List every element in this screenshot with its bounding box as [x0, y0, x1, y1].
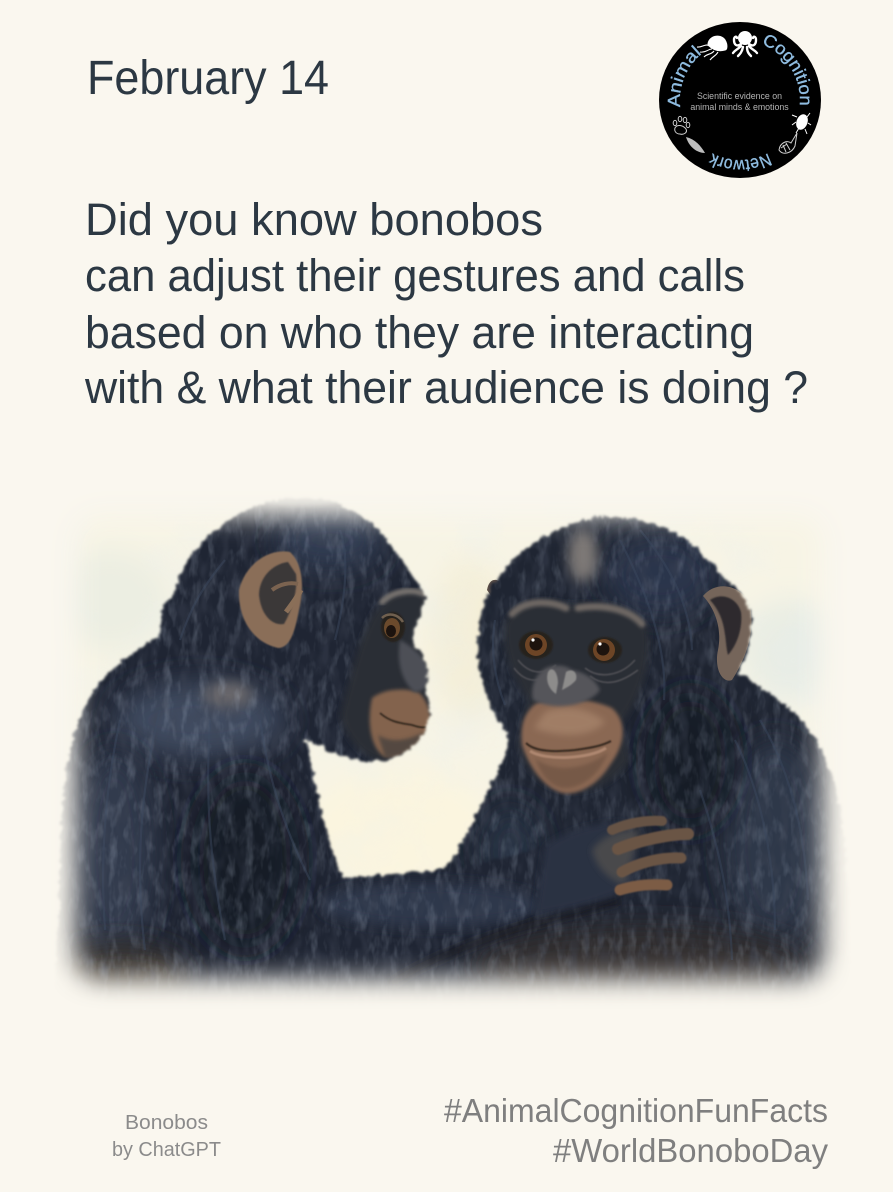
- hair strands: [493, 530, 808, 960]
- illustration: two bonobos: [56, 498, 844, 1000]
- hand: [535, 821, 688, 915]
- logo ring text: Network: [708, 153, 772, 172]
- image caption: [112, 1112, 221, 1161]
- icon: paw: [673, 116, 690, 134]
- left bonobo face: [340, 590, 434, 762]
- eye: [381, 612, 405, 642]
- muzzle: [370, 690, 430, 757]
- nose: [399, 640, 430, 692]
- lower lip and chin: [536, 755, 606, 788]
- left bonobo fur: [56, 498, 537, 1000]
- icon: fish: [779, 133, 797, 153]
- under-eye wrinkles: [514, 660, 638, 683]
- icon: beetle: [792, 113, 811, 134]
- image caption: Bonobos: [125, 1112, 208, 1134]
- arm shadow on chest: [390, 900, 620, 985]
- hashtags: #AnimalCognitionFunFacts: [444, 1092, 828, 1129]
- logo disc: [659, 22, 821, 178]
- left eye: [519, 631, 553, 659]
- muzzle: [522, 698, 623, 793]
- nose: [532, 666, 600, 706]
- brow: [382, 591, 424, 602]
- hair strands: [103, 530, 345, 950]
- mouth: [526, 741, 611, 751]
- logo tagline: Scientific evidence on: [697, 91, 782, 101]
- left bonobo ear: [239, 551, 302, 648]
- headline: with & what their audience is doing ?: [84, 362, 808, 413]
- icon: octopus: [733, 31, 757, 56]
- right bonobo face: [504, 601, 649, 793]
- right bonobo ear: [703, 586, 752, 681]
- right bonobo: [394, 514, 844, 1000]
- brow ridges: [512, 603, 642, 624]
- hashtags: [444, 1092, 828, 1169]
- fingers: [612, 821, 688, 890]
- back ear of right bonobo: [487, 580, 499, 595]
- logo ring text: [668, 35, 810, 172]
- right bonobo fur: [394, 514, 844, 1000]
- logo tagline: [690, 91, 789, 112]
- logo ring text: Animal: [668, 44, 702, 108]
- logo: Animal Cognition Network: [659, 22, 821, 178]
- logo ring text: Cognition: [764, 35, 810, 105]
- logo tagline: animal minds & emotions: [690, 102, 789, 112]
- mouth: [380, 713, 427, 727]
- headline: can adjust their gestures and calls: [85, 250, 745, 301]
- hashtags: #WorldBonoboDay: [553, 1132, 828, 1169]
- right eye: [588, 637, 622, 663]
- icon: feather: [686, 137, 705, 153]
- icon: jellyfish: [697, 36, 727, 60]
- date heading: February 14: [87, 52, 329, 105]
- headline: [84, 194, 808, 413]
- headline: based on who they are interacting: [85, 307, 754, 358]
- image caption: by ChatGPT: [112, 1139, 221, 1161]
- left bonobo: [56, 498, 537, 1000]
- headline: Did you know bonobos: [85, 194, 543, 245]
- watercolour background: [78, 525, 823, 878]
